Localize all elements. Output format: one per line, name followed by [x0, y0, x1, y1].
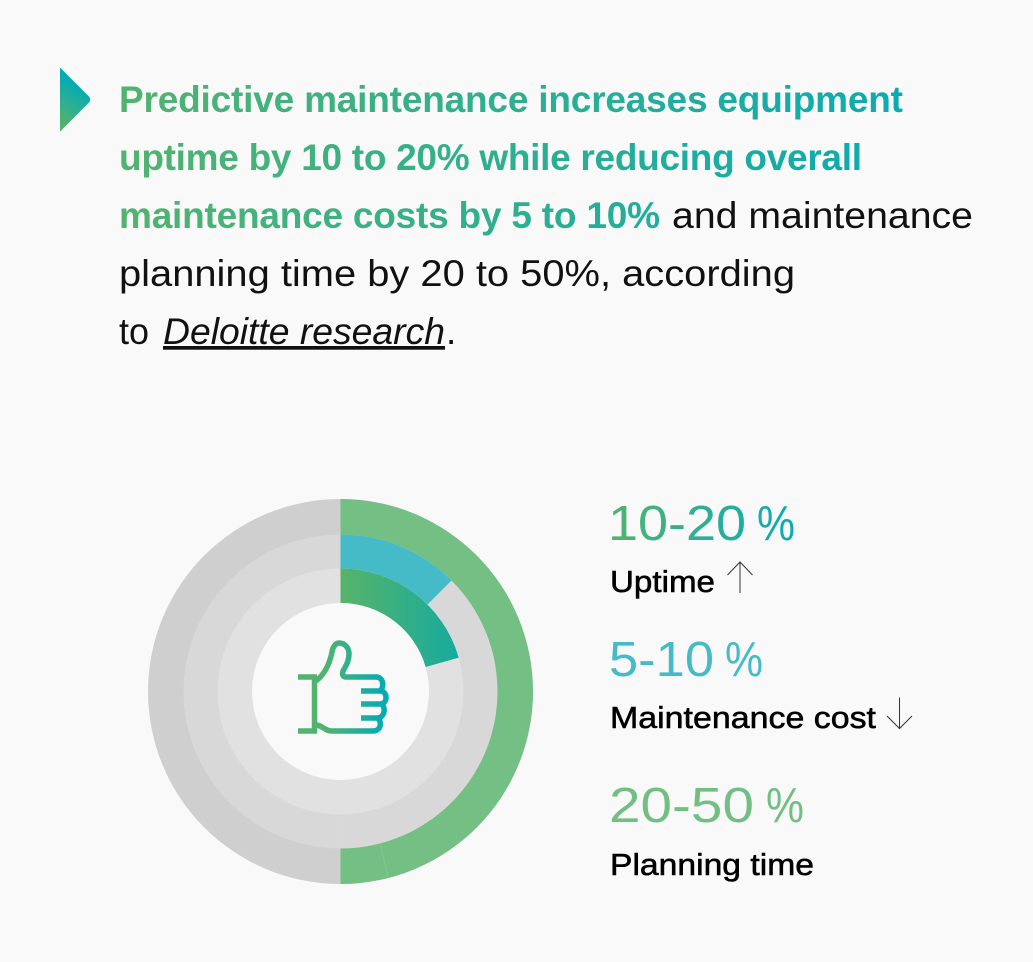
- heading paragraph: Deloitte research: [163, 311, 445, 352]
- stat: uptime: Uptime: [610, 564, 715, 599]
- arc: uptime: [340, 568, 459, 667]
- stat: maintenance cost: Maintenance cost: [610, 700, 876, 735]
- stat: uptime: 10-20: [608, 497, 746, 551]
- heading paragraph: Predictive maintenance increases equipment: [119, 79, 903, 120]
- ring: middle track: [184, 534, 498, 848]
- icon: thumbs up: [298, 643, 386, 731]
- stat: planning time: Planning time: [610, 847, 814, 882]
- stat: planning time: [609, 779, 814, 882]
- heading paragraph: uptime by 10 to 20% while reducing overall: [119, 137, 862, 178]
- ring: outer track: [148, 499, 533, 884]
- arc: planning time: [340, 499, 533, 884]
- stat: planning time: 20-50: [609, 779, 754, 833]
- stat: uptime: [608, 497, 795, 599]
- icon: triangle bullet: [60, 68, 90, 132]
- heading paragraph: maintenance costs by 5 to 10%: [119, 195, 660, 236]
- centre circle: [252, 603, 429, 780]
- icon: down arrow: [887, 698, 912, 728]
- stat: maintenance cost: [609, 633, 912, 735]
- seam marks: [340, 815, 388, 877]
- heading paragraph: .: [446, 311, 456, 352]
- stat: maintenance cost: 5-10: [609, 633, 714, 687]
- stat: maintenance cost: %: [725, 633, 763, 687]
- heading paragraph: planning time by 20 to 50%, according: [119, 253, 795, 294]
- arc: maintenance cost: [340, 534, 452, 605]
- heading paragraph: [119, 79, 973, 352]
- icon: up arrow: [728, 562, 752, 593]
- donut chart: [148, 499, 533, 884]
- stat: uptime: %: [757, 497, 795, 551]
- stat: planning time: %: [766, 779, 804, 833]
- heading paragraph: and maintenance: [672, 195, 973, 236]
- ring: inner track: [218, 568, 464, 814]
- heading paragraph: to: [119, 311, 149, 352]
